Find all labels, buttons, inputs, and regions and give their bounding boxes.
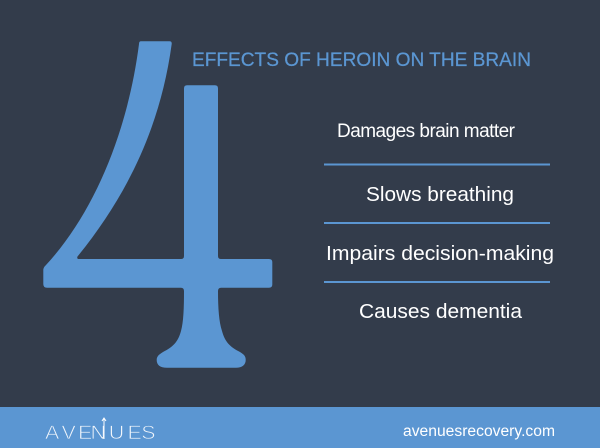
website url: avenuesrecovery.com	[403, 423, 555, 440]
avenues logo: AVENUES	[45, 422, 156, 444]
effect: damages brain matter: Damages brain matter	[337, 121, 516, 142]
title: EFFECTS OF HEROIN ON THE BRAIN	[192, 49, 531, 71]
effect: impairs decision-making: Impairs decision-making	[326, 243, 554, 265]
effect: causes dementia: Causes dementia	[359, 301, 523, 323]
effects list	[324, 121, 554, 323]
big numeral 4	[43, 41, 272, 368]
footer band	[0, 407, 600, 448]
effect: slows breathing: Slows breathing	[366, 184, 514, 206]
